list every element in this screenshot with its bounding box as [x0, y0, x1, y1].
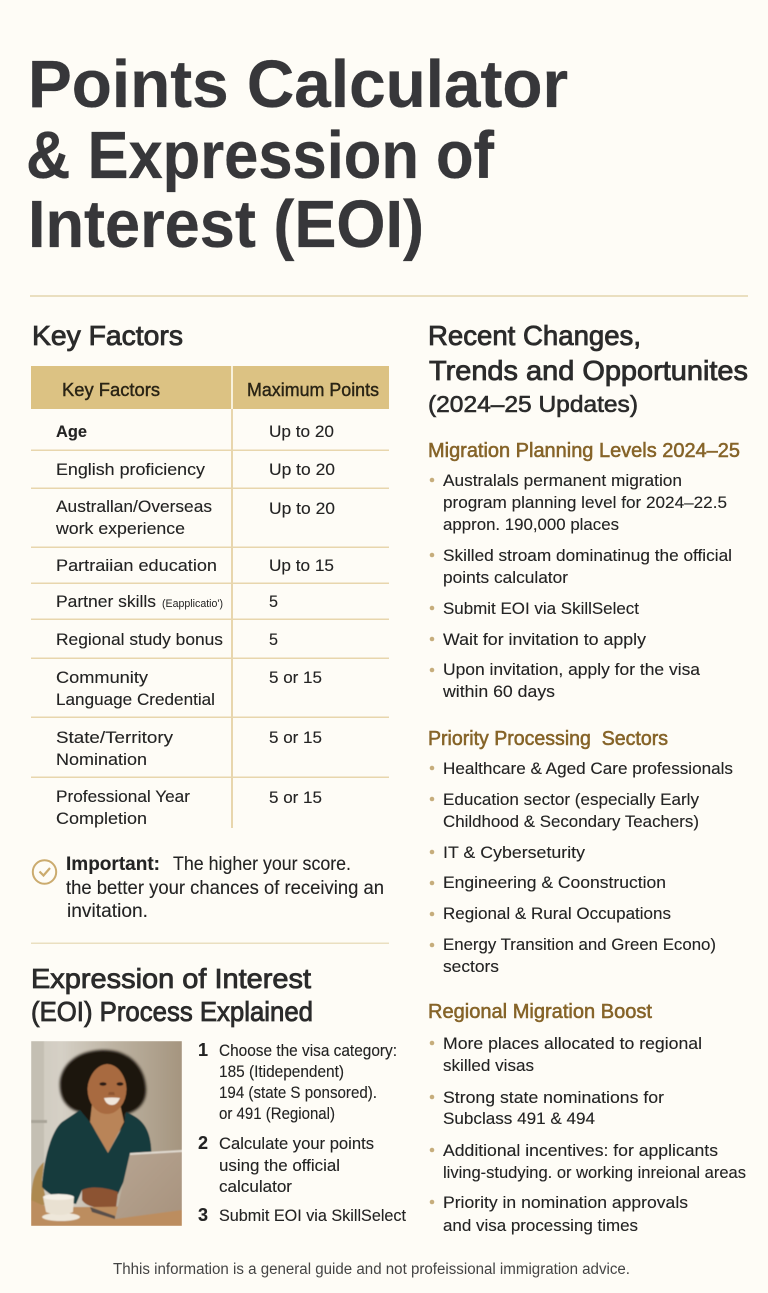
heading: eoi process — [31, 963, 313, 1027]
step 2: Calculate your points — [219, 1134, 374, 1153]
bullet list: Submit EOI via SkillSelect — [443, 599, 639, 618]
row: community language credential: Community — [56, 668, 149, 687]
bullet list — [442, 471, 732, 701]
heading: recent changes: (2024–25 Updates) — [428, 391, 638, 417]
step 2: calculator — [219, 1177, 292, 1196]
row: regional study bonus: Regional study bonus — [56, 630, 223, 649]
bullet list: sectors — [443, 957, 499, 976]
table header — [31, 366, 389, 409]
row: state nomination: 5 or 15 — [269, 728, 322, 747]
face — [88, 1064, 126, 1114]
bullet list: within 60 days — [442, 682, 555, 701]
bullet list: Regional & Rural Occupations — [443, 904, 671, 923]
process steps — [198, 1040, 406, 1225]
sweater — [42, 1110, 152, 1204]
row: education: Up to 15 — [269, 556, 334, 575]
bullet list: Subclass 491 & 494 — [443, 1109, 595, 1128]
row: partner skills: (Eapplicatio') — [162, 598, 223, 610]
coffee cup — [42, 1213, 80, 1221]
heading: recent changes: Trends and Opportunites — [429, 355, 748, 386]
callout: important: Important: — [66, 854, 160, 875]
title — [26, 47, 568, 262]
bullet list: Wait for invitation to apply — [443, 630, 647, 649]
bullet list: Priority in nomination approvals — [443, 1193, 688, 1212]
table header: Maximum Points — [247, 380, 379, 400]
laptop — [115, 1150, 182, 1219]
row: partner skills: Partner skills — [56, 592, 156, 611]
step 1: 194 (state S ponsored). — [219, 1083, 377, 1102]
bullet list: skilled visas — [443, 1056, 534, 1075]
row: english proficiency: English proficiency — [56, 460, 206, 479]
bullet list: Additional incentives: for applicants — [443, 1141, 718, 1160]
neck and chest — [90, 1104, 124, 1153]
bullet list: Childhood & Secondary Teachers) — [443, 812, 699, 831]
title: Points Calculator — [28, 47, 568, 122]
callout: important — [33, 854, 384, 922]
section: regional migration boost — [428, 1001, 746, 1235]
bullet list: Skilled stroam dominatinug the official — [443, 546, 732, 565]
step 3: 3 — [198, 1205, 208, 1225]
row: professional year: 5 or 15 — [269, 788, 322, 807]
bullet list: Engineering & Coonstruction — [443, 873, 666, 892]
row: regional study bonus: 5 — [269, 630, 278, 649]
heading: recent changes: Recent Changes, — [428, 320, 641, 351]
row: english proficiency: Up to 20 — [269, 460, 335, 479]
row: professional year: Professional Year — [56, 787, 190, 806]
hair — [60, 1050, 146, 1130]
table — [31, 1200, 182, 1226]
row: state nomination — [56, 728, 322, 769]
step 3: Submit EOI via SkillSelect — [219, 1206, 406, 1225]
row: partner skills — [56, 592, 278, 611]
heading: eoi process: (EOI) Process Explained — [31, 996, 313, 1027]
title: Interest (EOI) — [28, 187, 424, 262]
photo: smiling woman at laptop — [31, 1041, 182, 1226]
row: age: Age — [56, 422, 87, 441]
row: work experience: work experience — [55, 519, 185, 538]
row: work experience — [55, 497, 335, 538]
section: migration planning levels — [428, 440, 740, 701]
bullet list — [443, 1034, 746, 1235]
heading: eoi process: Expression of Interest — [31, 963, 311, 994]
step 1: 185 (Itidependent) — [219, 1062, 344, 1081]
bullet list: program planning level for 2024–22.5 — [443, 493, 727, 512]
row: english proficiency — [56, 460, 335, 479]
heading: recent changes — [428, 320, 748, 417]
row: community language credential — [56, 668, 322, 709]
row: community language credential: 5 or 15 — [269, 668, 322, 687]
step 2: using the official — [219, 1156, 340, 1175]
bullet list: Australals permanent migration — [443, 471, 682, 490]
bullet list: living-studying. or working inreional areas — [443, 1163, 746, 1182]
footer disclaimer: Thhis information is a general guide and not profeissional immigration advice. — [113, 1261, 630, 1278]
row: professional year — [56, 787, 322, 828]
hands — [82, 1188, 118, 1208]
step 1 — [198, 1040, 397, 1123]
row: state nomination: State/Territory — [56, 728, 174, 747]
bullet list: and visa processing times — [443, 1216, 638, 1235]
callout: important: invitation. — [67, 901, 148, 922]
step 1: 1 — [198, 1040, 208, 1060]
bullet list: Strong state nominations for — [443, 1088, 664, 1107]
row: education — [56, 556, 334, 575]
chair — [31, 1162, 47, 1205]
table: key factors and maximum points — [31, 366, 389, 828]
callout: important: The higher your score. — [173, 854, 351, 875]
subheading: Migration Planning Levels 2024–25 — [428, 440, 740, 462]
row: state nomination: Nomination — [56, 750, 147, 769]
bullet list: points calculator — [443, 568, 568, 587]
row: age — [56, 422, 334, 441]
bullet list: Education sector (especially Early — [443, 790, 699, 809]
table header: Key Factors — [62, 380, 160, 400]
row: education: Partraiian education — [56, 556, 217, 575]
callout: important: the better your chances of receiving an — [66, 878, 384, 899]
bullet list: appron. 190,000 places — [443, 515, 619, 534]
bullet list: More places allocated to regional — [443, 1034, 702, 1053]
step 1: or 491 (Regional) — [219, 1104, 335, 1123]
row: partner skills: 5 — [269, 592, 278, 611]
bullet list: IT & Cyberseturity — [443, 843, 586, 862]
icon: check circle — [33, 860, 56, 884]
heading: key factors: Key Factors — [32, 320, 183, 351]
row: work experience: Up to 20 — [269, 499, 335, 518]
bullet list: Energy Transition and Green Econo) — [443, 935, 716, 954]
title: & Expression of — [26, 118, 495, 193]
bullet list: Upon invitation, apply for the visa — [443, 660, 701, 679]
row: professional year: Completion — [56, 809, 147, 828]
subheading: Regional Migration Boost — [428, 1001, 652, 1023]
step 2: 2 — [198, 1133, 208, 1153]
subheading: Priority Processing Sectors — [428, 728, 668, 750]
bullet list — [443, 759, 733, 976]
row: work experience: Australlan/Overseas — [56, 497, 212, 516]
bullet list: Healthcare & Aged Care professionals — [443, 759, 733, 778]
step 1: Choose the visa category: — [219, 1041, 397, 1060]
section: priority processing sectors — [428, 728, 733, 976]
row: community language credential: Language Credential — [56, 690, 215, 709]
row: age: Up to 20 — [269, 422, 334, 441]
step 2 — [198, 1133, 374, 1196]
